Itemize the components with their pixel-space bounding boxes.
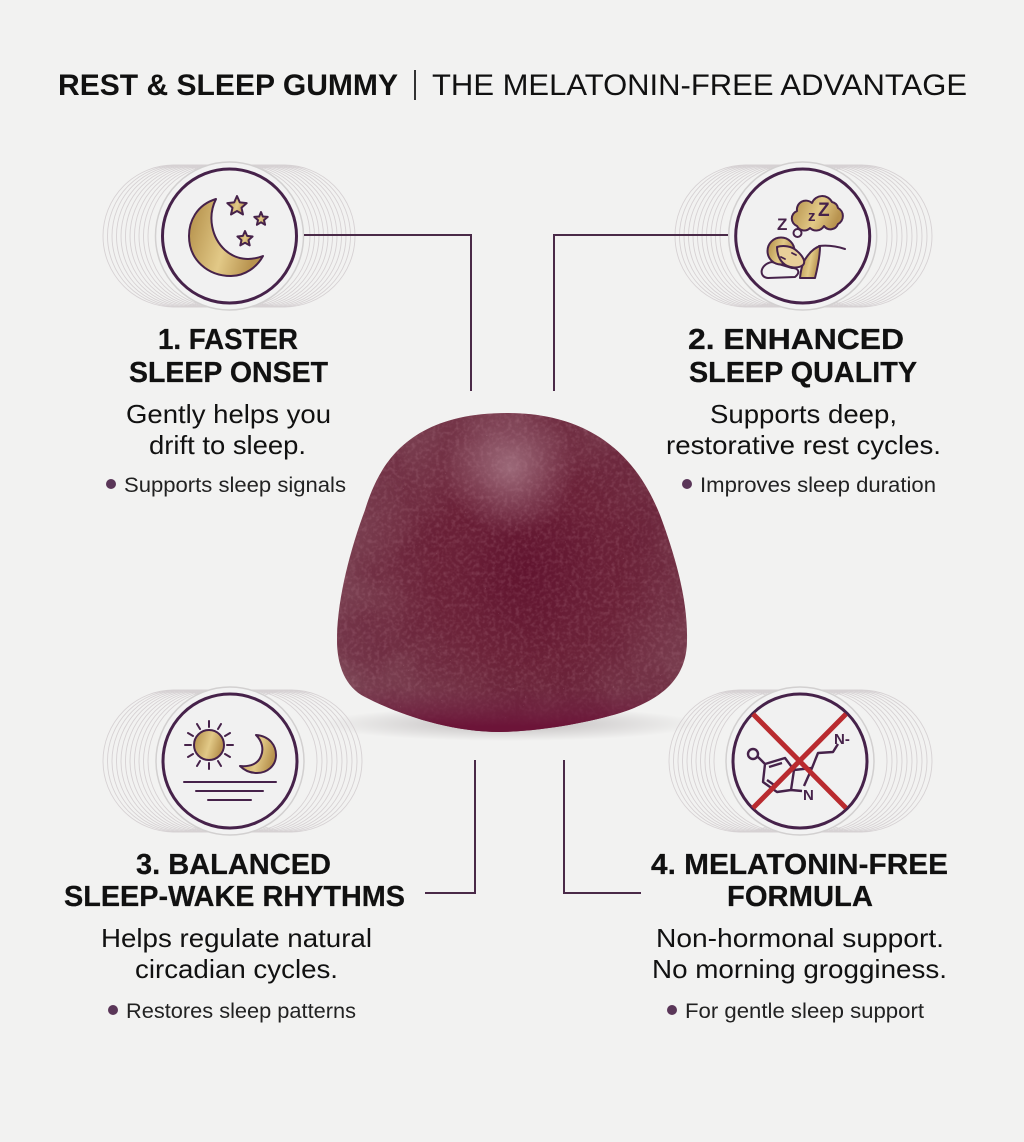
description: Non-hormonal support. — [656, 923, 944, 953]
description — [126, 399, 331, 460]
heading — [129, 324, 328, 389]
heading — [64, 849, 405, 913]
heading — [651, 849, 948, 913]
title: THE MELATONIN-FREE ADVANTAGE — [432, 69, 967, 102]
panel: enhanced sleep quality — [666, 162, 941, 497]
description — [101, 923, 372, 984]
heading: SLEEP QUALITY — [689, 357, 917, 389]
icon: sleeping person badge — [675, 162, 932, 310]
icon: sleeping person badge: z — [808, 208, 816, 225]
description — [666, 399, 941, 460]
bullet: For gentle sleep support — [685, 999, 924, 1023]
icon: moon and stars badge — [103, 162, 355, 310]
description: Gently helps you — [126, 399, 331, 429]
description: drift to sleep. — [149, 430, 306, 460]
title: REST & SLEEP GUMMY — [58, 69, 398, 102]
heading: 3. BALANCED — [136, 849, 331, 881]
heading: FORMULA — [727, 881, 873, 913]
description: circadian cycles. — [135, 954, 338, 984]
heading — [688, 324, 917, 389]
bullet: Supports sleep signals — [124, 473, 346, 497]
gummy product image — [337, 413, 688, 738]
icon: sleeping person badge: Z — [777, 215, 787, 234]
connector lines — [304, 235, 728, 893]
icon: sleeping person badge: Z — [818, 200, 830, 221]
description: restorative rest cycles. — [666, 430, 941, 460]
icon: crossed-out molecule badge: N — [803, 787, 814, 804]
description: Supports deep, — [710, 399, 897, 429]
heading: SLEEP-WAKE RHYTHMS — [64, 881, 405, 913]
description: No morning grogginess. — [652, 954, 947, 984]
panel: melatonin-free formula — [651, 687, 948, 1023]
heading: 1. FASTER — [158, 324, 298, 356]
icon: sun and moon badge — [103, 687, 362, 835]
icon: crossed-out molecule badge: N- — [834, 731, 850, 748]
panel: faster sleep onset — [103, 162, 355, 497]
heading: 4. MELATONIN-FREE — [651, 849, 948, 881]
panel: balanced sleep-wake rhythms — [64, 687, 405, 1023]
bullet: Restores sleep patterns — [126, 999, 356, 1023]
heading: SLEEP ONSET — [129, 357, 328, 389]
title — [58, 69, 967, 102]
heading: 2. ENHANCED — [688, 324, 904, 356]
description — [652, 923, 947, 984]
icon: crossed-out molecule badge — [669, 687, 932, 835]
description: Helps regulate natural — [101, 923, 372, 953]
bullet: Improves sleep duration — [700, 473, 936, 497]
